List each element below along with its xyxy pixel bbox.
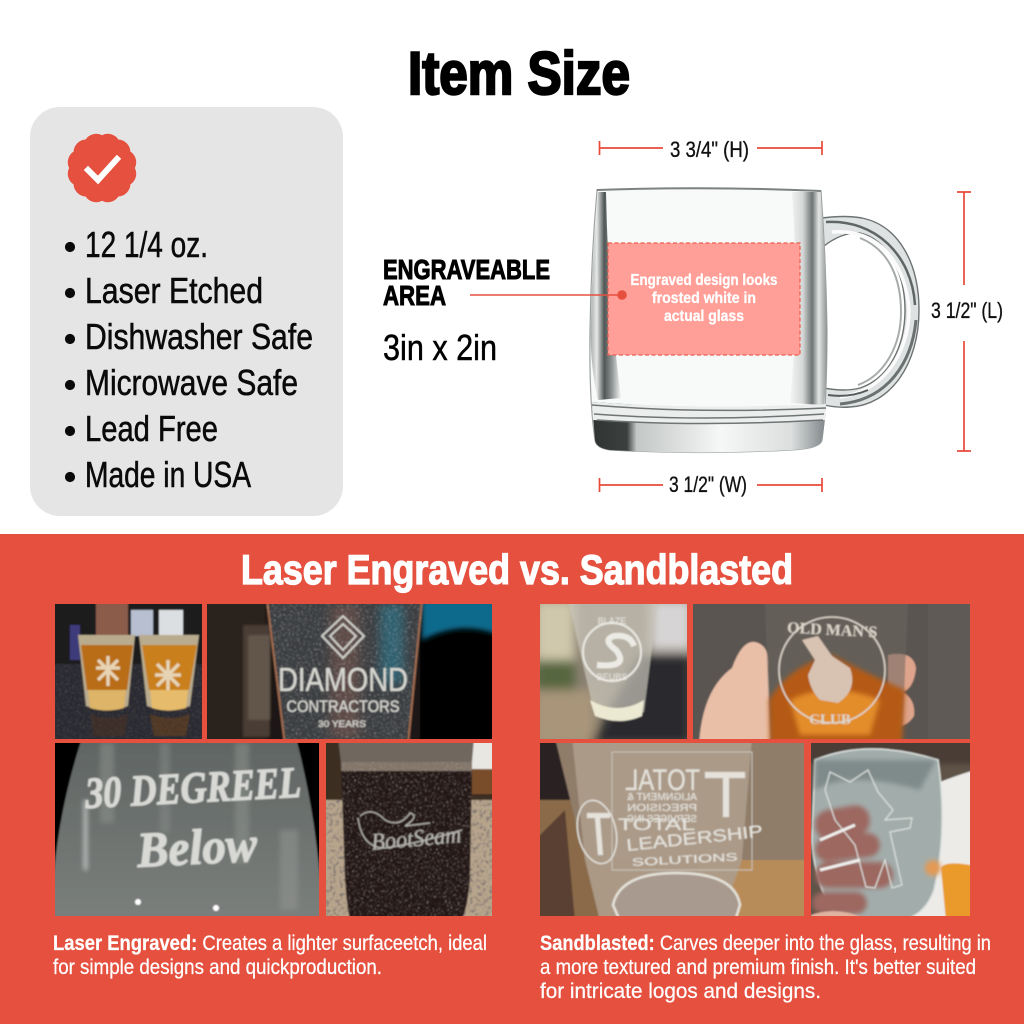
photo: total leadership rocks glass: [535, 738, 809, 921]
engraving note: [630, 272, 778, 325]
dimension: width: [599, 472, 822, 497]
title: Item Size: [408, 40, 630, 107]
engraving note: Engraved design looks: [630, 272, 778, 289]
etched cat: [825, 770, 912, 888]
caption: sandblasted: [540, 932, 991, 1003]
engraveable area label: 3in x 2in: [383, 327, 497, 368]
engraveable area label: ENGRAVEABLE: [383, 254, 550, 285]
dimension: height: [599, 137, 822, 162]
orange cup: [940, 862, 970, 916]
engraveable area highlight: [608, 243, 800, 355]
photo: old man's club glass: [693, 604, 970, 739]
panel: laser engraved vs sandblasted: [0, 534, 1024, 1024]
mug right wall: [790, 192, 827, 405]
caption: laser engraved: for simple designs and quickproduction.: [53, 956, 382, 979]
photo: blaze dragon glass: [540, 604, 687, 739]
photo: diamond contractors pint glass: [207, 604, 492, 739]
engraveable area label: AREA: [383, 280, 446, 311]
etched dragon emblem: [583, 616, 641, 682]
wine glass: [812, 749, 942, 921]
etched logos: PRECISION: [627, 803, 697, 814]
photo: cat stemless wine glass: [811, 743, 970, 916]
engraving note: actual glass: [664, 308, 744, 325]
etched lettering: [84, 766, 301, 868]
dimension: length: 3 1/2" (L): [931, 298, 1003, 323]
etched wordmark: [278, 661, 408, 729]
etched wordmark: 30 YEARS: [318, 719, 366, 729]
mug illustration: [590, 188, 919, 452]
etched club emblem: OLD MAN'S: [787, 620, 878, 641]
caption: laser engraved: Laser Engraved: Creates a lighter surfaceetch, ideal: [53, 932, 487, 955]
etched logos: [572, 752, 764, 870]
feature list: Made in USA: [85, 454, 251, 495]
etched signature: [358, 812, 462, 856]
section heading: Laser Engraved vs. Sandblasted: [241, 546, 793, 593]
engraveable area label: [383, 254, 550, 368]
etched logos: TOTAL: [618, 815, 695, 834]
etched lettering: Below: [135, 816, 259, 878]
hand: [699, 642, 772, 745]
mug body: [590, 188, 827, 452]
etched logos: ALIGNMENT &: [627, 792, 697, 803]
etched dragon emblem: BEUBS: [597, 672, 627, 682]
etched club emblem: [779, 617, 885, 728]
caption: sandblasted: for intricate logos and designs.: [540, 980, 821, 1003]
dimension: length: [931, 192, 1003, 451]
icon: verified badge: [69, 135, 135, 201]
feature list: 12 1/4 oz.: [85, 224, 208, 265]
etched dragon emblem: BLAZE: [598, 616, 626, 626]
etched lettering: 30 DEGREEL: [83, 758, 302, 818]
feature list: Lead Free: [85, 408, 218, 449]
engraving note: frosted white in: [652, 290, 756, 307]
etched logos: SERVICES INC: [627, 814, 697, 825]
hand: [812, 803, 893, 914]
feature list: Microwave Safe: [85, 362, 298, 403]
mug base: [592, 402, 826, 452]
etched club emblem: CLUB: [809, 712, 851, 728]
feature list: Dishwasher Safe: [85, 316, 313, 357]
etched logos: SOLUTIONS: [632, 851, 738, 869]
etched logo: [322, 616, 364, 658]
etched signature: BootSeam: [370, 822, 462, 856]
mug handle: [822, 216, 919, 407]
feature list: Laser Etched: [85, 270, 263, 311]
etched logos: TOTAL: [625, 764, 700, 797]
panel: product features: [30, 107, 343, 516]
dimension: height: 3 3/4" (H): [670, 137, 749, 162]
etched logos: LEADERSHIP: [625, 822, 764, 855]
photo: soda glass with boot logo: [326, 743, 492, 916]
etched wordmark: CONTRACTORS: [286, 697, 400, 716]
feature list: [65, 224, 313, 495]
photo: 30 degrees below glass: [50, 738, 324, 921]
caption: sandblasted: a more textured and premium finish. It's better suited: [540, 956, 976, 979]
dimension: width: 3 1/2" (W): [669, 472, 747, 497]
photo: engraved shot glasses: [55, 604, 202, 739]
mug left wall: [591, 192, 621, 400]
etched wordmark: DIAMOND: [278, 661, 408, 698]
callout line to engraveable area: [470, 290, 627, 300]
caption: laser engraved: [53, 932, 487, 979]
